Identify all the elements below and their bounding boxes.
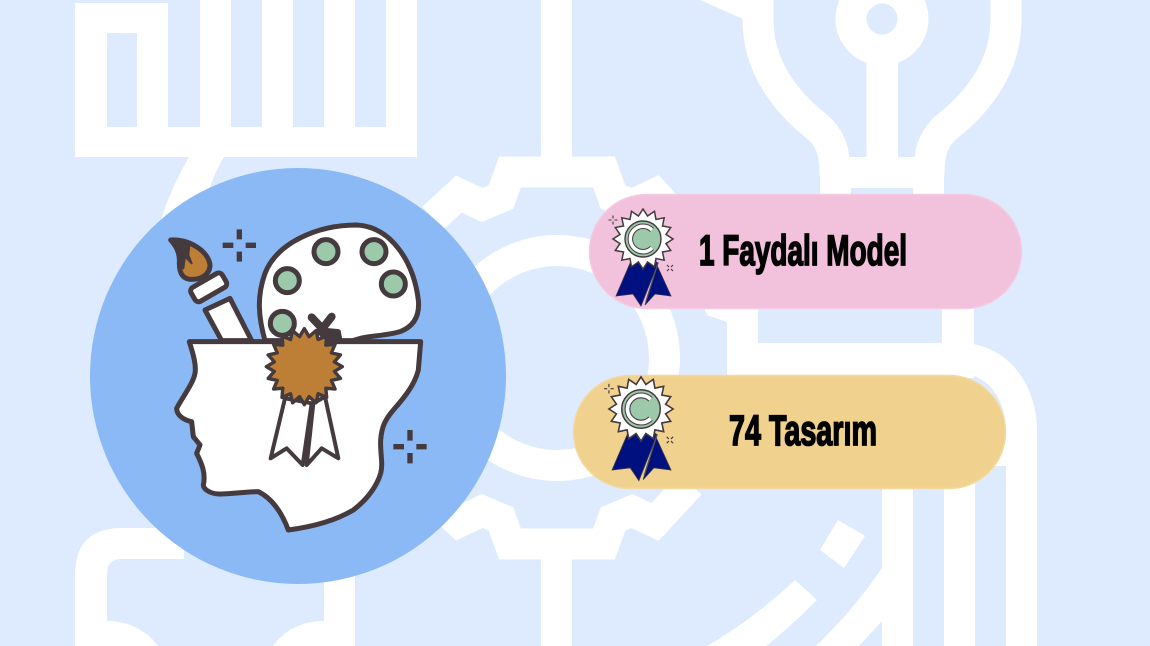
panel: 1 Faydalı Model pill: [590, 194, 1022, 308]
icon: head rosette seal: [266, 329, 342, 405]
icon: yellow pill rosette: [604, 377, 673, 481]
icon: sparkle bottom: [393, 430, 427, 463]
icon: pink pill rosette: [608, 209, 673, 306]
icon: paint brush: [171, 240, 252, 341]
icon: sparkle top: [223, 229, 256, 262]
text: 1 Faydalı Model: 1 Faydalı Model: [699, 227, 907, 275]
icon: palette: [259, 225, 419, 341]
icon: head profile: [177, 342, 421, 530]
panel: 74 Tasarım pill: [574, 376, 1006, 488]
panel: blue circle: [90, 168, 506, 584]
icon: creative head with palette, brush and rosette: [171, 225, 427, 530]
text: 74 Tasarım: 74 Tasarım: [729, 407, 877, 455]
icon: head rosette ribbon: [271, 397, 338, 465]
